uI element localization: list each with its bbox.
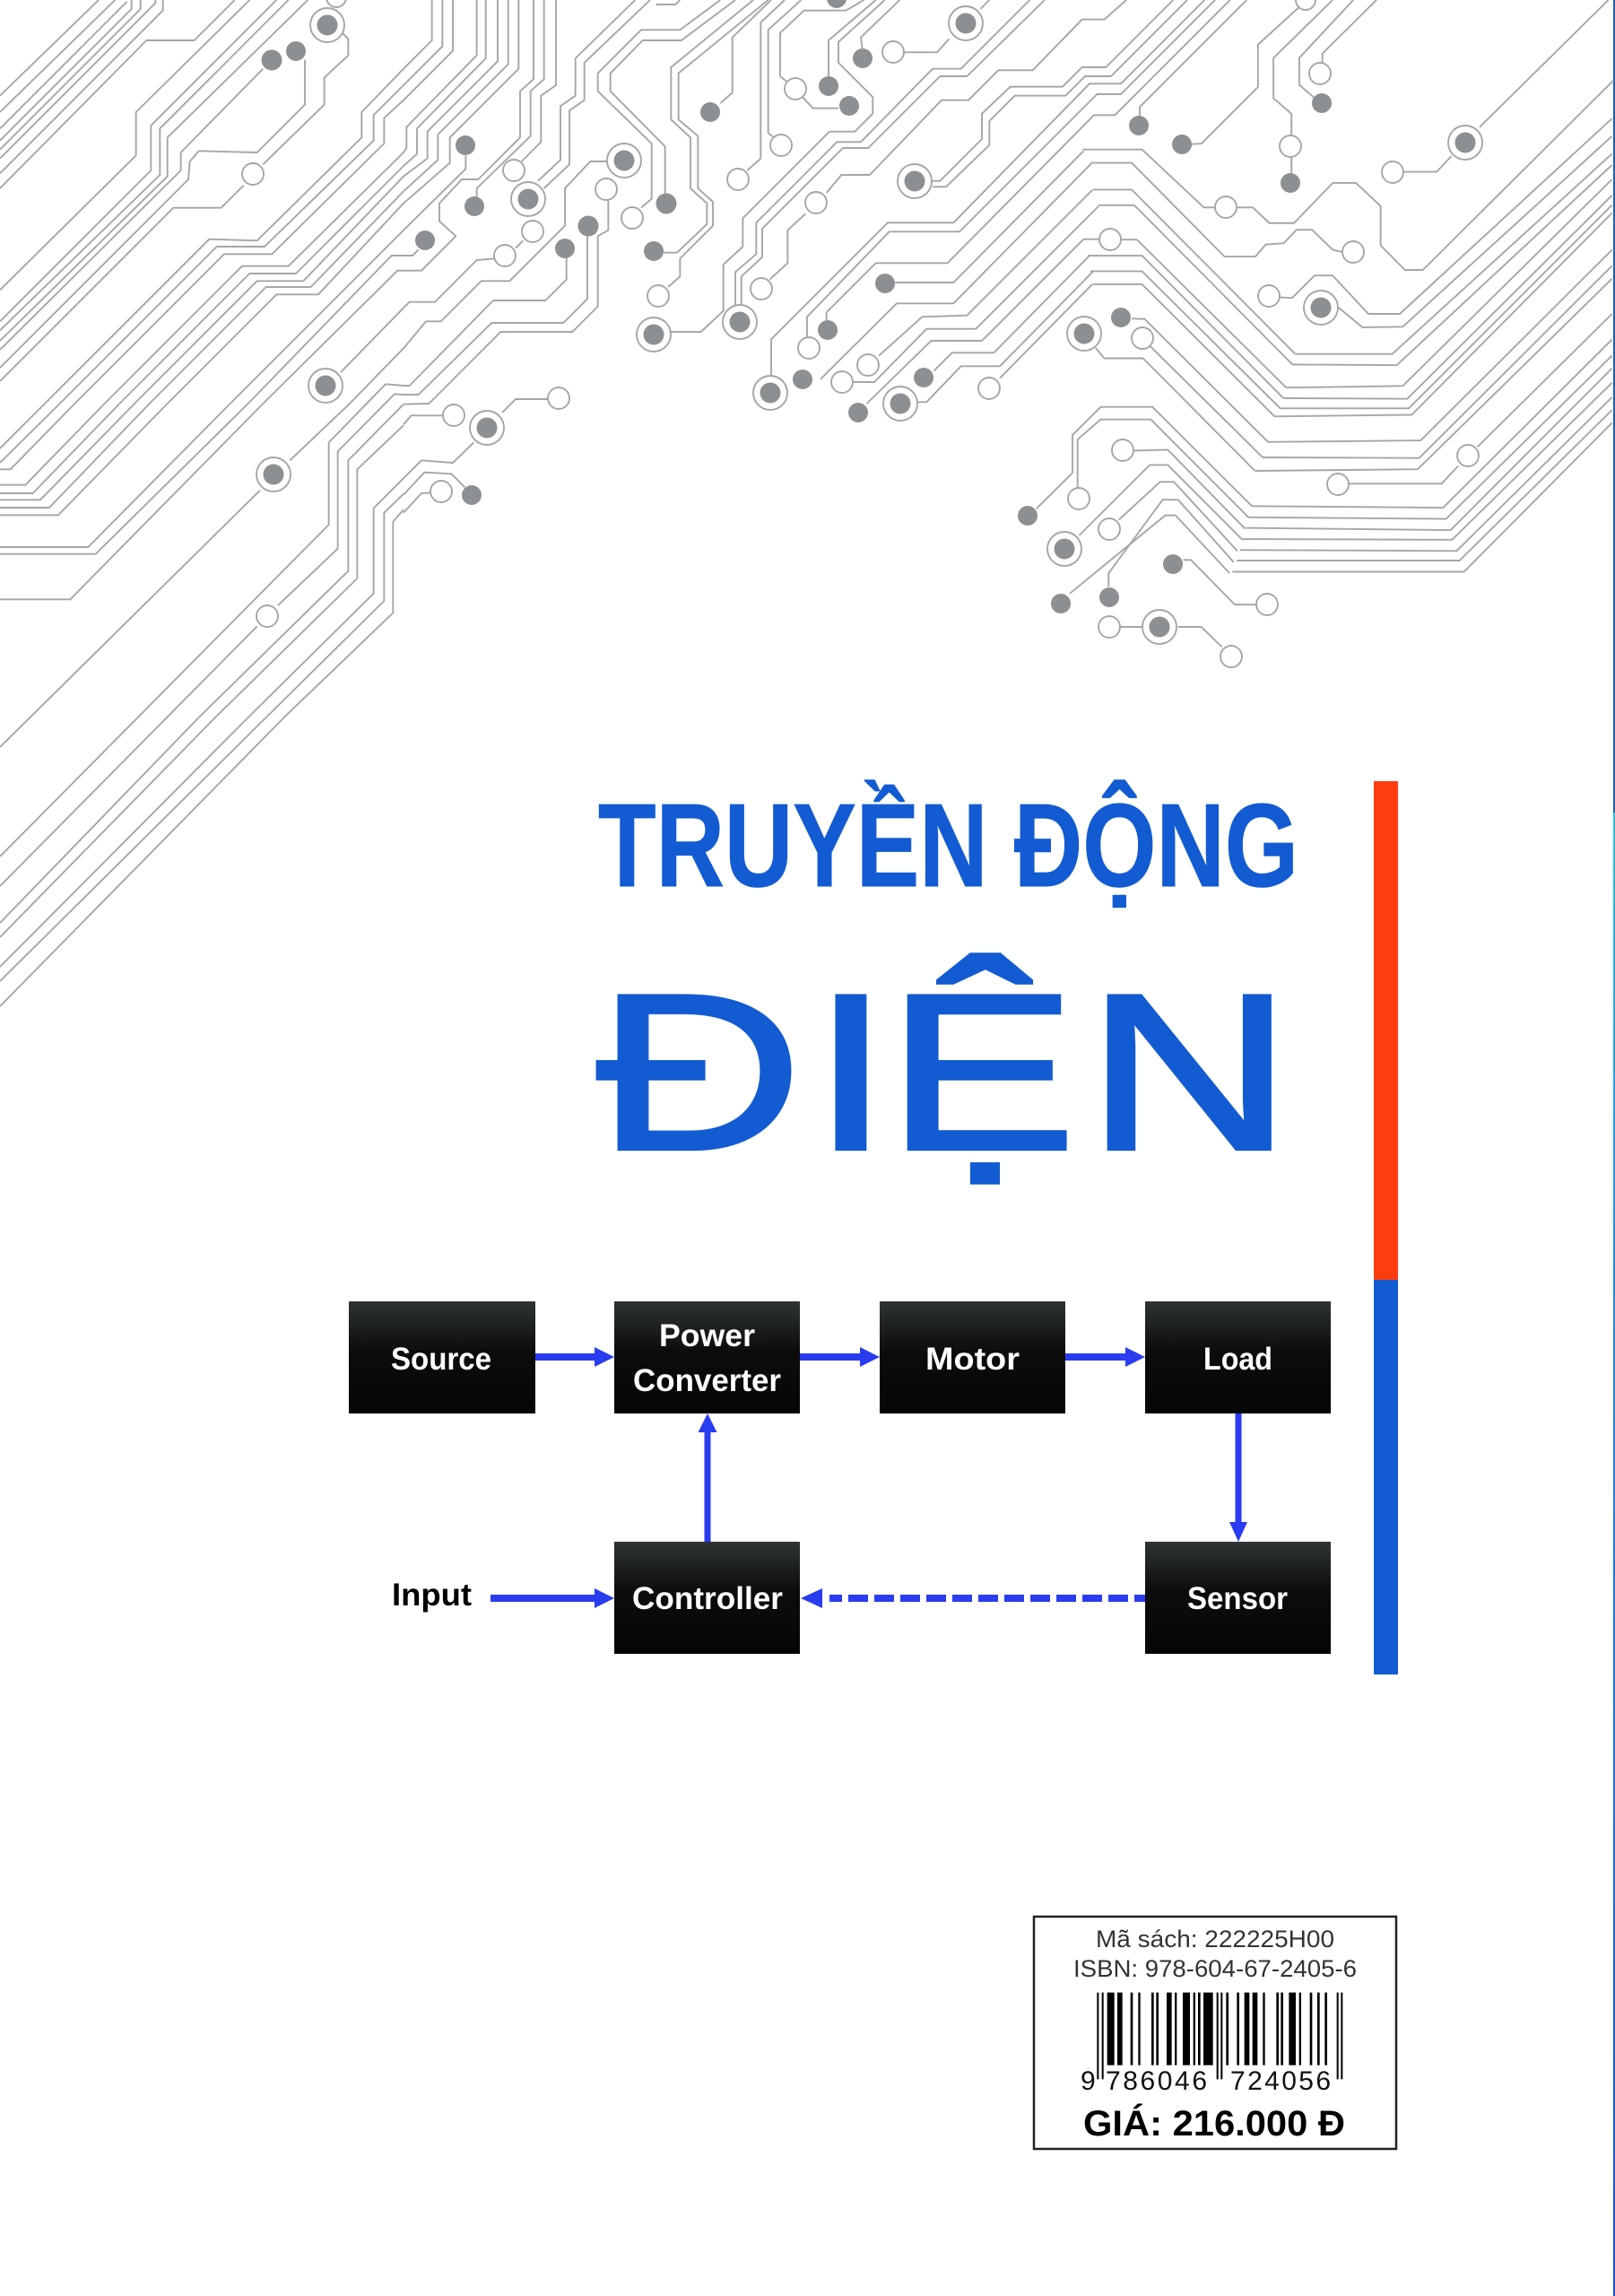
arrow: Load to Sensor [1229, 1413, 1247, 1542]
block: Motor: Motor [925, 1342, 1020, 1377]
right edge strip [1613, 0, 1615, 2296]
ring pad outlines [256, 6, 1482, 644]
traces: upper right [1037, 0, 1613, 647]
open pads [242, 0, 1479, 667]
arrow: Source to Power Converter [535, 1347, 614, 1367]
arrow: Input to Controller [491, 1588, 614, 1608]
barcode price box [1034, 1917, 1396, 2149]
block: Sensor: Sensor [1187, 1581, 1288, 1616]
traces: lower-left [0, 384, 404, 1006]
traces: far right [1232, 118, 1612, 571]
traces: upper middle [671, 0, 1246, 404]
barcode digits: 724056 [1230, 2066, 1331, 2096]
block: Motor [880, 1301, 1065, 1413]
block: Power Converter [614, 1301, 800, 1413]
arrow: Power Converter to Motor [800, 1347, 880, 1367]
label: Input: Input [392, 1578, 472, 1613]
barcode digits: 9 [1081, 2066, 1096, 2096]
price: GIÁ: 216.000 Đ [1083, 2103, 1345, 2144]
title: TRUYỀN ĐỘNG: TRUYỀN ĐỘNG [598, 779, 1298, 911]
block: Controller: Controller [632, 1581, 783, 1616]
arrow: Controller to Power Converter [698, 1413, 717, 1542]
block diagram [349, 1301, 1331, 1654]
box outline [1034, 1917, 1396, 2149]
traces: top-left [0, 0, 404, 404]
arrow: Motor to Load [1065, 1347, 1145, 1367]
barcode bars [1097, 1993, 1342, 2079]
block: Load: Load [1203, 1342, 1272, 1377]
block: Power Converter: Converter [633, 1363, 781, 1398]
block: Load [1145, 1301, 1331, 1413]
barcode digits [1081, 2066, 1331, 2096]
block: Controller [614, 1542, 800, 1654]
ISBN: ISBN: 978-604-67-2405-6 [1073, 1955, 1357, 1982]
book code: Mã sách: 222225H00 [1096, 1926, 1334, 1952]
block: Source [349, 1301, 535, 1413]
traces: centre bottom [404, 269, 598, 513]
barcode digits: 786046 [1106, 2066, 1207, 2096]
ring pad centres [264, 13, 1476, 637]
solid pads [262, 0, 1332, 613]
block: Power Converter: Power [659, 1318, 755, 1353]
vertical accent bar [1374, 781, 1398, 1674]
circuit board artwork [0, 0, 1613, 1006]
arrow: Sensor to Controller (dashed) [801, 1588, 1145, 1608]
block: Sensor [1145, 1542, 1331, 1654]
block: Source: Source [391, 1342, 491, 1377]
traces: centre top [404, 0, 768, 348]
title: ĐIỆN: ĐIỆN [596, 948, 1292, 1196]
